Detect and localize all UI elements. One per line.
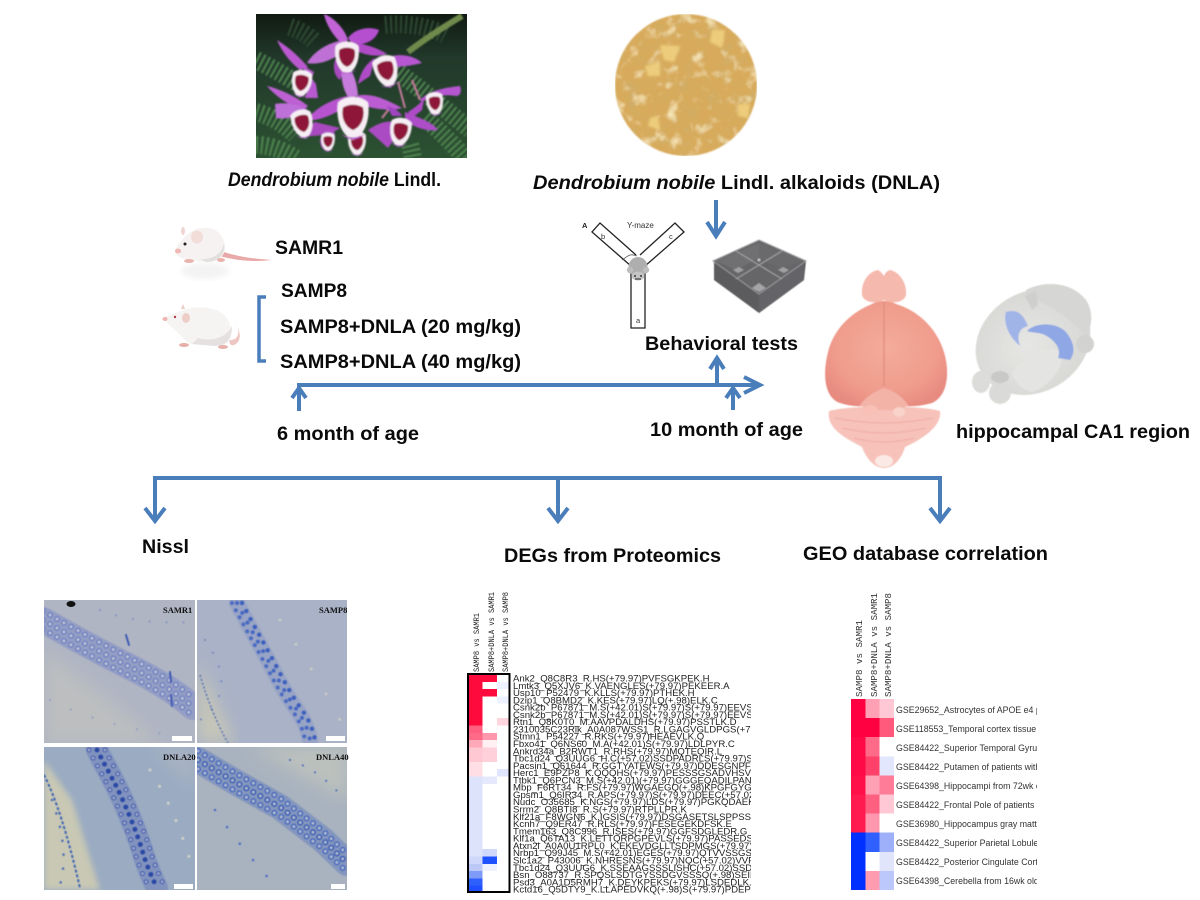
chart: GEO correlation heatmap: GSE84422_Putamen of patients with AD <box>896 762 1054 772</box>
label: SAMR1: SAMR1 <box>275 238 343 259</box>
chart: proteomics heatmap: Ank2_Q8C8R3_R.HS(+79.97)PVFSGKPEK.H <box>513 674 710 684</box>
chart: proteomics heatmap: Klf1a_Q6TA13_K.LETTQRPGPEVLS(+79.97)PASSEDSGPK <box>513 834 774 845</box>
icon: Y-maze: c <box>669 232 673 241</box>
chart: proteomics heatmap: Klf21a_F8WGN6_K.IGSIS(+79.97)DSGASETSLSPPSSPGK <box>513 812 772 823</box>
chart: GEO correlation heatmap: GSE64398_Cerebella from 16wk old mice <box>896 876 1060 886</box>
micrograph: SAMR1 <box>43 600 195 743</box>
label: Dendrobium nobile Lindl.: Dendrobium nobile Lindl. <box>228 170 441 191</box>
chart: proteomics heatmap: Kcnh7_Q9ER47_R.RLS(+79.97)FESEGEKDFSK.E <box>513 819 732 830</box>
micrograph: DNLA40 <box>197 747 347 890</box>
chart: proteomics heatmap: Lmtk3_Q5XJV6_K.VAENGLES(+79.97)PEKEER.A <box>513 681 730 692</box>
heading: Nissl: Nissl <box>142 537 189 558</box>
arrow: behavioral tests marker <box>710 358 724 385</box>
chart: proteomics heatmap: 2310035C23Rik_A0A087WSS1_R.LGAGVGLDPGS(+79.97) <box>513 724 772 735</box>
heading: DEGs from Proteomics: DEGs from Proteomics <box>504 546 721 567</box>
icon: Y-maze: a <box>636 316 641 325</box>
chart: proteomics heatmap: Slc1a2_P43006_K.NHRESNS(+79.97)NQC(+57.02)VVPLK <box>513 856 767 866</box>
chart: proteomics heatmap: Mbp_F6RT34_R.FS(+79.97)WGAEGQ(+.98)KPGFGYGGR <box>513 783 766 794</box>
icon: 3D brain with hippocampus <box>956 268 1110 416</box>
heading: GEO database correlation: GEO database correlation <box>803 544 1048 565</box>
chart: proteomics heatmap: Tbc1d24_Q3UUG6_K.SSEAAGSSSLISHC(+57.02)SSDPADR <box>513 863 778 874</box>
chart: proteomics heatmap: SAMP8 vs SAMR1 <box>473 613 482 672</box>
chart: proteomics heatmap: SAMP8+DNLA vs SAMR1 <box>488 592 497 672</box>
chart: proteomics heatmap: Herc1_E9PZP8_K.QQQHS(+79.97)PESSSGSADVHSVSR <box>513 768 764 779</box>
chart: proteomics heatmap: Nudc_O35685_K.NGS(+79.97)LDS(+79.97)PGKQDAEKPA <box>513 797 767 808</box>
panel: Nissl micrographs <box>43 600 349 890</box>
chart: proteomics heatmap: Usp10_P52479_K.KLLS(+79.97)PTHEK.H <box>513 688 695 699</box>
chart: GEO correlation heatmap: GSE36980_Hippocampus gray matter AD <box>896 819 1059 829</box>
chart: GEO correlation heatmap: GSE64398_Hippocampi from 72wk old mice <box>896 781 1069 791</box>
chart: proteomics heatmap: Gpsm1_Q6IR34_R.APS(+79.97)S(+79.97)DEEC(+57.02)FF <box>513 790 769 801</box>
label: Behavioral tests: Behavioral tests <box>645 334 798 355</box>
icon: Y-maze: Y-maze <box>627 221 654 230</box>
photo: mouse brain <box>825 270 947 468</box>
icon: Y-maze <box>582 221 684 328</box>
chart: GEO correlation heatmap: SAMP8+DNLA vs SAMP8 <box>883 593 894 697</box>
chart: GEO correlation heatmap: GSE84422_Frontal Pole of patients with AD <box>896 800 1067 810</box>
chart: proteomics heatmap: Srrm2_Q8BTI8_R.S(+79.97)RTPLLPR.K <box>513 804 688 816</box>
micrograph: SAMP8 <box>197 600 347 743</box>
photo: Dendrobium nobile orchid <box>256 14 470 165</box>
arrow: study timeline <box>297 377 760 393</box>
bracket: SAMP8 groups <box>259 297 266 361</box>
arrow: three-way branch <box>145 478 950 521</box>
label: DNLA alkaloids: Dendrobium nobile Lindl. alkaloids (DNLA) <box>533 173 940 194</box>
icon: SAMP8 rat <box>162 304 240 349</box>
chart: GEO correlation heatmap: SAMP8+DNLA vs SAMR1 <box>869 592 880 697</box>
label: hippocampal CA1 region: hippocampal CA1 region <box>956 422 1190 443</box>
label: 10 month of age: 10 month of age <box>650 420 803 441</box>
arrow: DNLA to behavioral tests <box>707 200 725 236</box>
label: SAMP8: SAMP8 <box>281 281 347 302</box>
chart: proteomics heatmap: Dzip1_Q8BMD2_K.KES(+79.97)LQ(+.98)ELK.C <box>513 695 718 706</box>
panel: Nissl micrographs: DNLA40 <box>316 752 349 762</box>
chart: proteomics heatmap: Csnk2b_P67871_M.S(+42.01)S(+79.97)S(+79.97)EEVSWISWFCGLR <box>513 703 812 714</box>
chart: proteomics heatmap: Bsn_O88737_R.SPQSLSDTGYSSDGVSSSQ(+.98)SEIK <box>513 870 757 881</box>
chart: GEO correlation heatmap <box>851 594 1037 890</box>
chart: proteomics heatmap: Fbxo41_Q6NS60_M.A(+42.01)S(+79.97)LDLPYR.C <box>513 739 735 750</box>
chart: proteomics heatmap <box>467 592 751 895</box>
chart: proteomics heatmap: Psd3_A0A1D5RMH7_K.DEYKPEKS(+79.97)LSDEDLK.H <box>513 877 759 888</box>
photo: DNLA powder <box>615 14 757 156</box>
panel: Nissl micrographs: DNLA20 <box>163 752 196 762</box>
chart: proteomics heatmap: Pacsin1_Q61644_R.GGTYATEWS(+79.97)DDESGNPFGG <box>513 761 766 772</box>
chart: proteomics heatmap: Atxn2l_A0A0U1RPL0_K.EKEVDGLLTSDPMGS(+79.97)PV <box>513 841 766 852</box>
micrograph: DNLA20 <box>44 747 195 890</box>
chart: GEO correlation heatmap: GSE84422_Posterior Cingulate Cortex of AD <box>896 857 1071 867</box>
chart: proteomics heatmap: Nrbp1_Q99J45_M.S(+42.01)EGES(+79.97)QTVVSSGSDPK <box>513 848 772 859</box>
chart: GEO correlation heatmap: GSE84422_Superior Parietal Lobule of AD <box>896 838 1062 848</box>
arrow: 6 month marker <box>292 388 306 411</box>
panel: Nissl micrographs: SAMP8 <box>319 605 347 615</box>
icon: SAMR1 mouse <box>175 227 272 279</box>
panel: Nissl micrographs: SAMR1 <box>163 605 192 615</box>
icon: open-field box <box>713 240 806 313</box>
icon: Y-maze: b <box>601 232 605 241</box>
chart: GEO correlation heatmap: SAMP8 vs SAMR1 <box>854 619 865 697</box>
chart: proteomics heatmap: SAMP8+DNLA vs SAMP8 <box>502 592 511 672</box>
chart: proteomics heatmap: Ankrd34a_B2RWT1_R.RHS(+79.97)MQTEQIR.L <box>513 746 723 757</box>
label: 6 month of age: 6 month of age <box>277 424 419 445</box>
chart: GEO correlation heatmap: GSE84422_Superior Temporal Gyrus of AD <box>896 743 1066 753</box>
chart: proteomics heatmap: Stmn1_P54227_R.RKS(+79.97)HEAEVLK.Q <box>513 732 704 743</box>
chart: proteomics heatmap: Tbc1d24_Q3UUG6_H.C(+57.02)SSDPADRLS(+79.97)SPK <box>513 754 766 765</box>
chart: GEO correlation heatmap: GSE118553_Temporal cortex tissue of AD <box>896 724 1060 734</box>
label: SAMP8+DNLA 20 mg/kg: SAMP8+DNLA (20 mg/kg) <box>280 317 521 338</box>
chart: GEO correlation heatmap: GSE29652_Astrocytes of APOE e4 patients <box>896 705 1067 715</box>
arrow: 10 month marker <box>726 388 740 410</box>
chart: proteomics heatmap: Csnk2b_P67871_M.S(+42.01)S(+79.97)S(+79.97)EEVSWISWFCGLR <box>513 710 812 721</box>
chart: proteomics heatmap: Rtn1_Q8K0T0_M.AAVPDALDHS(+79.97)PSSTLK.D <box>513 717 737 728</box>
chart: proteomics heatmap: Tmem163_Q8C996_R.ISES(+79.97)GGFSDGLEDR.G <box>513 826 747 837</box>
chart: proteomics heatmap: Kctd16_Q5DTY9_K.LLAPEDVKQ(+.98)S(+79.97)PDEPGK <box>513 885 765 896</box>
chart: proteomics heatmap: Ttbk1_Q6PCN3_M.S(+42.01)(+79.97)GGGEQADILPANYV <box>513 775 765 786</box>
icon: Y-maze: A <box>582 221 588 230</box>
label: SAMP8+DNLA 40 mg/kg: SAMP8+DNLA (40 mg/kg) <box>280 352 521 373</box>
